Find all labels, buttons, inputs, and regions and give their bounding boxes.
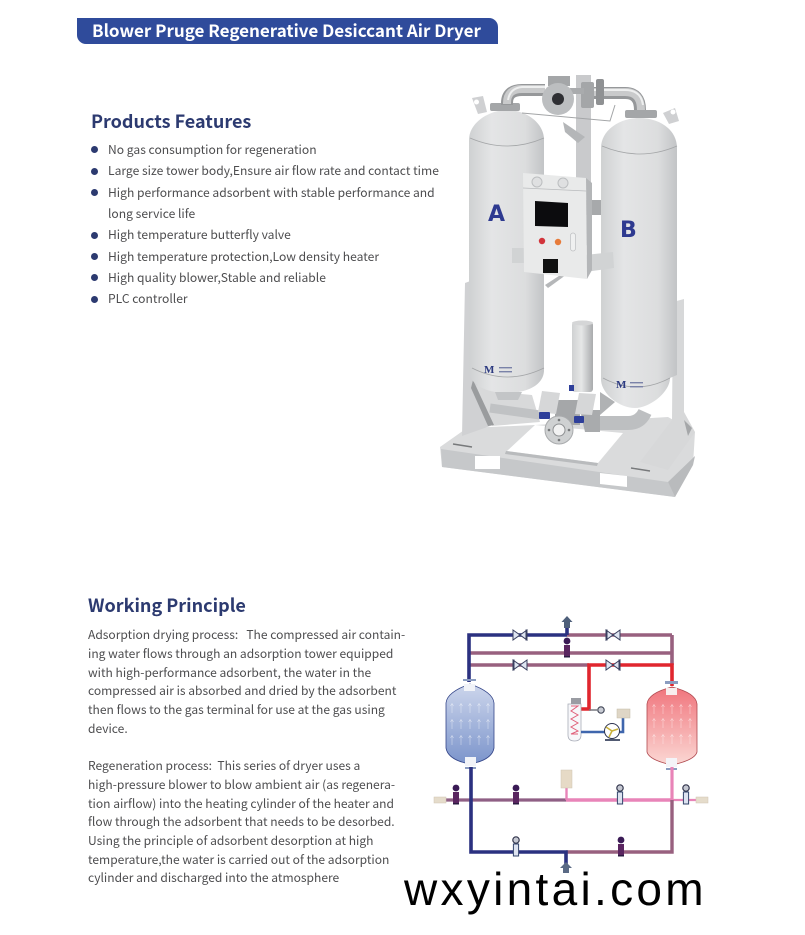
- logos on towers: [484, 364, 643, 391]
- tower letter A: A: [488, 202, 505, 227]
- text: regeneration process: Regeneration process: This series of dryer uses a: [88, 757, 360, 774]
- feature list: High performance adsorbent with stable performance and: [108, 184, 435, 200]
- text: regeneration process: Using the principle of adsorbent desorption at high: [88, 832, 373, 849]
- text: adsorption drying process: then flows to the gas terminal for use at the gas using: [88, 701, 385, 718]
- top piping and valves: [490, 76, 657, 143]
- product illustration: twin tower dryer: [440, 75, 695, 497]
- control box: [523, 173, 592, 279]
- text: regeneration process: high-pressure blower to blow ambient air (as regenera-: [88, 776, 395, 793]
- feature list: High temperature butterfly valve: [108, 226, 291, 243]
- text: adsorption drying process: Adsorption drying process: The compressed air contain-: [88, 626, 405, 643]
- text: regeneration process: temperature,the water is carried out of the adsorption: [88, 851, 389, 868]
- feature list: Large size tower body,Ensure air flow rate and contact time: [108, 162, 439, 179]
- tower A: [469, 96, 544, 400]
- text: regeneration process: flow through the adsorbent that needs to be desorbed.: [88, 813, 395, 830]
- lower valves: [453, 785, 689, 856]
- heading: products features: Products Features: [91, 108, 251, 134]
- feature list: long service life: [108, 204, 195, 222]
- logos on towers: M: [484, 364, 495, 376]
- adsorption tower (blue): [446, 679, 494, 769]
- top valves: [513, 630, 620, 670]
- lower piping and valves: [490, 385, 645, 444]
- base frame: [440, 417, 695, 497]
- text: adsorption drying process: compressed air is absorbed and dried by the adsorbent: [88, 682, 396, 699]
- blower and intake filter: [581, 709, 630, 740]
- outlet arrow: [562, 616, 572, 628]
- brackets behind control box: [512, 200, 614, 288]
- temperature gauge: [589, 707, 604, 713]
- text: regeneration process: cylinder and discharged into the atmosphere: [88, 869, 339, 886]
- text: regeneration process: tion airflow) into the heating cylinder of the heater and: [88, 794, 394, 812]
- watermark url: wxyintai.com: [404, 863, 707, 915]
- tower B: [601, 108, 679, 408]
- lower manifold pipes: [445, 767, 697, 866]
- text: adsorption drying process: ing water flows through an adsorption tower equipped: [88, 645, 393, 662]
- title banner: Blower Pruge Regenerative Desiccant Air Dryer: [92, 17, 481, 42]
- support legs: [462, 280, 695, 470]
- text: adsorption drying process: [88, 626, 405, 737]
- regeneration tower (red): [647, 681, 697, 770]
- feature list: No gas consumption for regeneration: [108, 140, 317, 158]
- text: adsorption drying process: device.: [88, 720, 128, 737]
- feature list: [91, 140, 439, 307]
- inlet arrow: [560, 862, 572, 873]
- lower filter canister: [572, 320, 593, 392]
- logos on towers: M: [616, 379, 627, 391]
- tower letter B: B: [620, 218, 637, 243]
- text: adsorption drying process: with high-performance adsorbent, the water in the: [88, 664, 371, 680]
- central column: [576, 75, 591, 245]
- silencers and vent filter: [434, 770, 708, 803]
- feature list: PLC controller: [108, 290, 188, 307]
- text: regeneration process: [88, 757, 395, 886]
- process flow diagram: [434, 616, 708, 873]
- heater with coil: [568, 698, 581, 741]
- heading: working principle: Working Principle: [88, 592, 246, 618]
- top manifold pipes: [469, 622, 672, 709]
- feature list: High quality blower,Stable and reliable: [108, 268, 326, 286]
- feature list: High temperature protection,Low density heater: [108, 248, 379, 264]
